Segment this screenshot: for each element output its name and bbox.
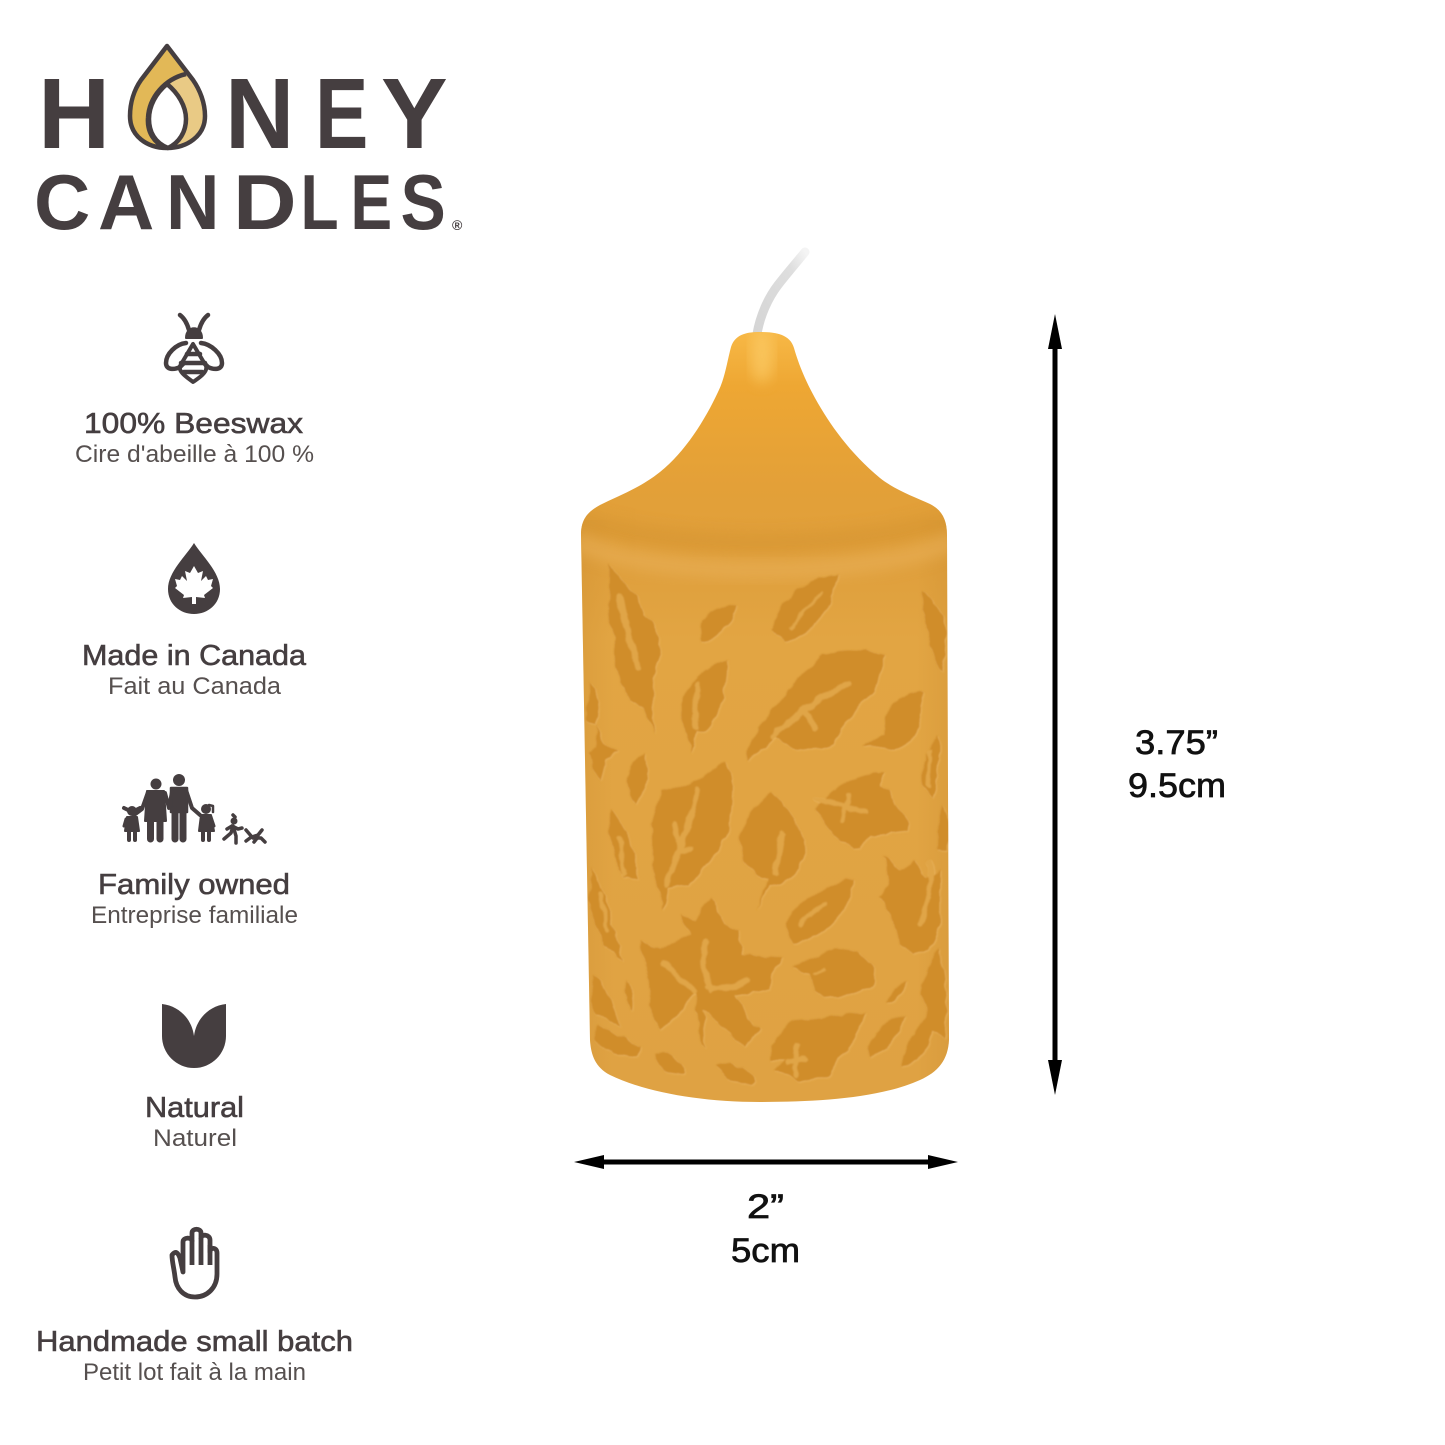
logo word: CANDLES: A — [98, 158, 154, 246]
heading: Made in Canada — [82, 640, 307, 672]
logo: Honey Candles — [34, 46, 463, 246]
heading: Handmade small batch — [36, 1326, 353, 1358]
registered mark: ® — [452, 217, 463, 233]
logo word: CANDLES — [34, 158, 446, 246]
candle shading and leaves — [575, 327, 955, 1110]
icon: hand — [172, 1229, 217, 1297]
heading: Natural — [145, 1092, 244, 1124]
logo word: CANDLES: E — [350, 158, 392, 246]
logo word: HONEY: H — [38, 58, 110, 170]
logo word: CANDLES: D — [233, 159, 297, 246]
feature: Natural — [145, 1004, 244, 1152]
heading: Family owned — [98, 869, 290, 901]
width label: 5cm — [731, 1232, 800, 1270]
icon: tulip leaf — [162, 1004, 226, 1068]
candle photo illustration — [575, 252, 955, 1110]
logo flame icon — [130, 46, 205, 148]
candle wick — [757, 252, 805, 334]
arrow: height dimension — [1048, 314, 1062, 1095]
height label: 3.75” — [1135, 724, 1218, 762]
logo word: HONEY — [38, 57, 448, 170]
logo word: HONEY: Y — [381, 58, 448, 170]
arrow: width dimension — [574, 1155, 958, 1169]
feature: Handmade small batch — [36, 1229, 353, 1386]
candle body — [581, 332, 949, 1102]
feature: Family owned — [91, 774, 298, 929]
French subheading: Fait au Canada — [108, 673, 282, 700]
French subheading: Entreprise familiale — [91, 902, 298, 929]
icon: bee — [166, 315, 222, 382]
logo word: HONEY: E — [315, 59, 368, 170]
French subheading: Cire d'abeille à 100 % — [75, 441, 314, 468]
width label — [731, 1188, 800, 1270]
icon: drop with maple leaf — [168, 543, 220, 614]
height label: 9.5cm — [1128, 767, 1226, 805]
height label — [1128, 724, 1226, 805]
logo word: CANDLES: N — [166, 159, 220, 246]
French subheading: Petit lot fait à la main — [83, 1359, 306, 1386]
logo word: CANDLES: S — [400, 160, 446, 246]
feature: Made in Canada — [82, 543, 307, 700]
embossed leaf pattern — [586, 563, 948, 1084]
width label: 2” — [747, 1188, 784, 1226]
feature: 100% Beeswax — [75, 315, 314, 468]
logo word: HONEY: N — [225, 57, 294, 169]
logo word: CANDLES: L — [300, 158, 339, 246]
heading: 100% Beeswax — [84, 408, 304, 440]
icon: family silhouettes — [124, 774, 265, 843]
logo word: CANDLES: C — [34, 158, 90, 246]
French subheading: Naturel — [153, 1125, 237, 1152]
